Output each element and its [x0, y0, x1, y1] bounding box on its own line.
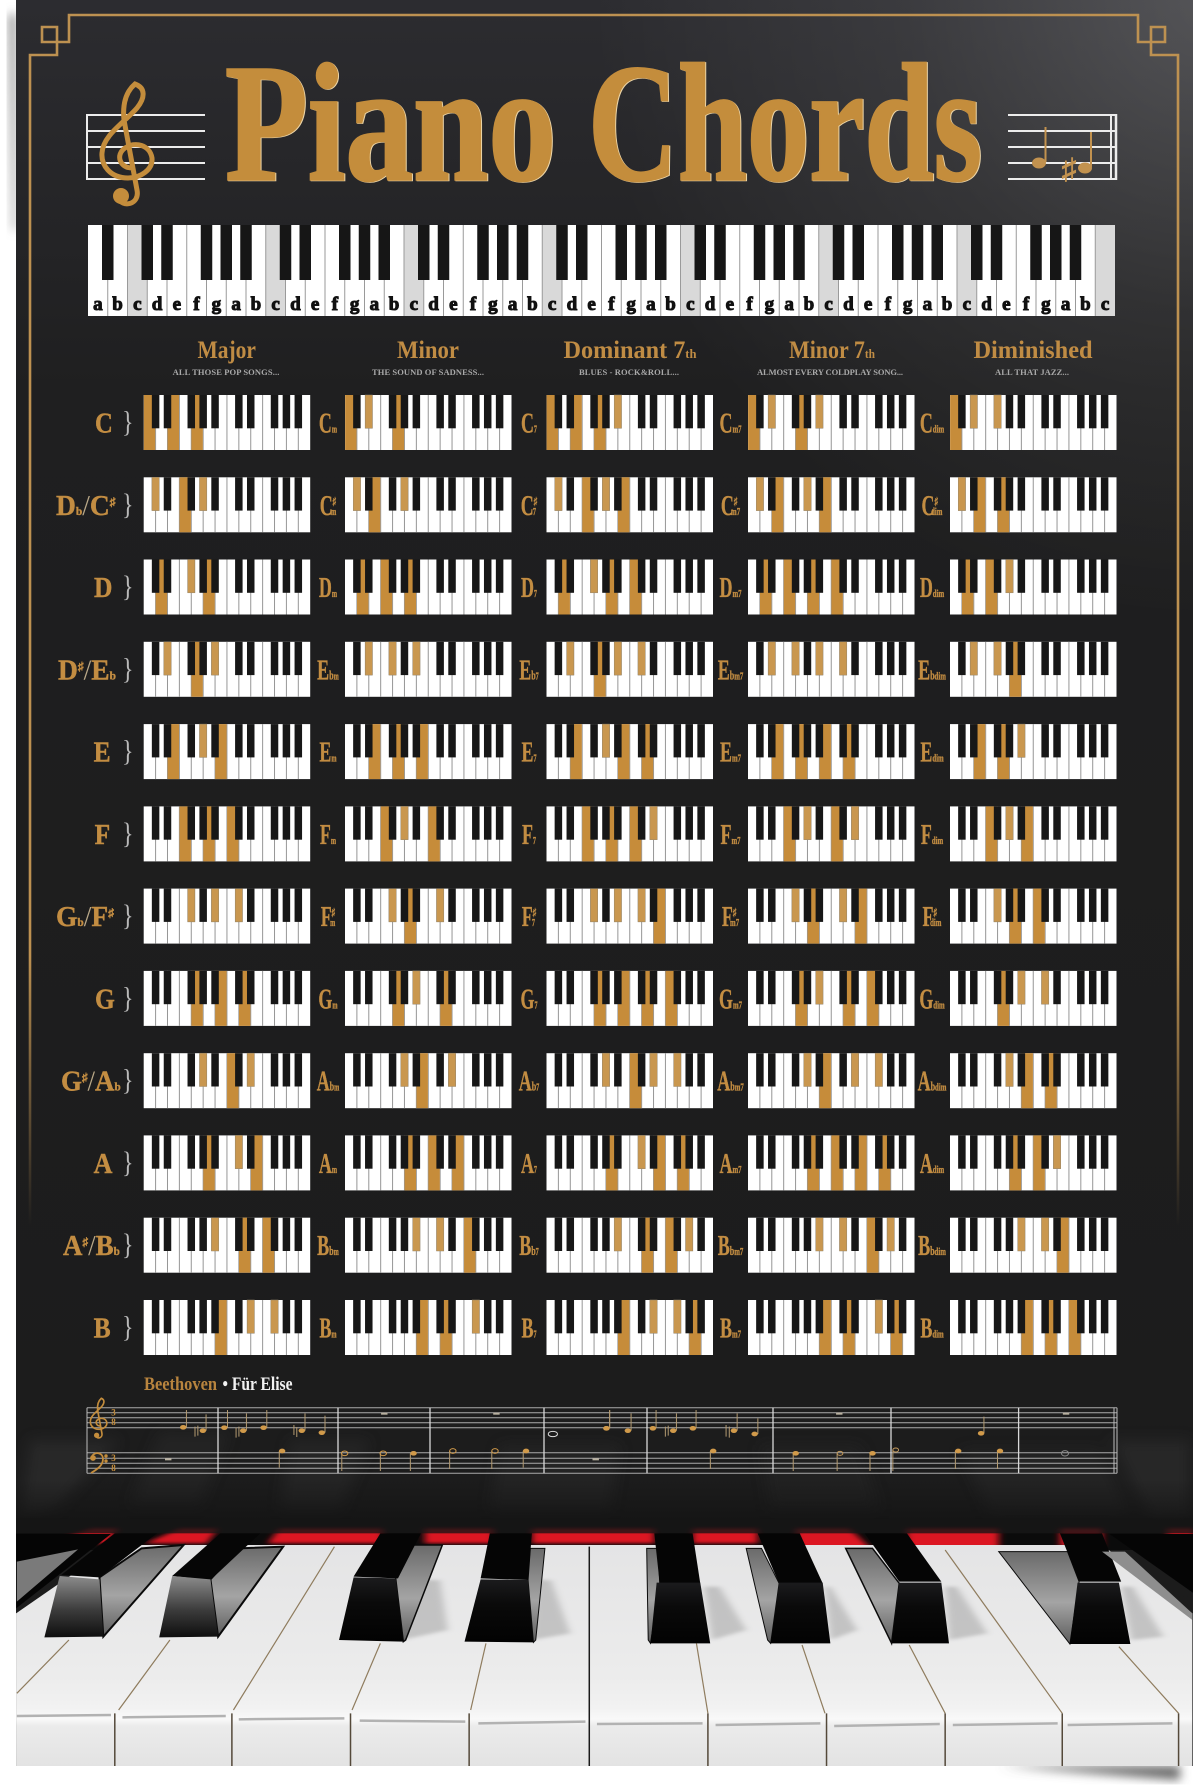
label: Bm7: Bm7 — [720, 1313, 741, 1345]
label: F#7: F — [522, 902, 533, 933]
row label: G#/Ab: } — [122, 1063, 134, 1096]
time signatures: 8 — [111, 1417, 116, 1427]
chord: G minor — [345, 971, 512, 1026]
chord: Fdim — [950, 806, 1116, 861]
row label: G#/Ab: Ab — [95, 1066, 121, 1098]
chord: Gdim — [950, 971, 1116, 1026]
time signatures: 3 — [111, 1408, 116, 1418]
label: Bdim: Bdim — [920, 1313, 944, 1345]
chord: B minor — [345, 1300, 512, 1355]
label: F#m7: F — [722, 902, 733, 933]
label: Edim: Edim — [920, 738, 944, 769]
title: Chords — [588, 30, 982, 216]
chord: Eb7 — [546, 642, 713, 697]
full 88-key keyboard with note letters — [88, 225, 1115, 316]
column heading: Major: Major — [197, 337, 256, 364]
row label: D: } — [122, 569, 134, 603]
label: C#m: m — [331, 506, 336, 517]
black key: far right corner — [1102, 1534, 1194, 1620]
chord diagrams row Eb — [144, 642, 1116, 697]
label: Abdim: Abdim — [918, 1067, 947, 1098]
title: Piano — [226, 31, 557, 217]
chord: Ab major — [144, 1053, 310, 1108]
label: F#m: F — [321, 902, 332, 933]
row label: Db/C# — [56, 487, 134, 522]
label: C#m7: ♯ — [734, 495, 738, 507]
row label: Db/C#: Db/C — [56, 490, 110, 522]
label: Dm7: Dm7 — [719, 573, 742, 604]
chord: A major — [144, 1135, 310, 1190]
label: Bb7: Bb7 — [519, 1231, 539, 1262]
chord diagrams row E — [144, 724, 1116, 779]
chord: F#7 — [546, 889, 713, 944]
row label: D#/Eb: / — [84, 655, 91, 686]
label: F#7: ♯ — [533, 906, 537, 919]
row label: B — [94, 1310, 134, 1344]
row label: G — [95, 981, 134, 1015]
row label: D#/Eb: D — [58, 655, 78, 686]
label: Bbdim: Bbdim — [918, 1231, 946, 1262]
label: F7: F7 — [522, 820, 536, 851]
label: Abm7: Abm7 — [717, 1067, 744, 1098]
label: F#dim: ♯ — [934, 906, 937, 919]
chord diagrams row C — [144, 395, 1116, 450]
dark fade above keyboard photo — [16, 1480, 1193, 1534]
row label: A#/Bb: / — [88, 1230, 96, 1262]
label: Fm7: Fm7 — [720, 820, 741, 851]
row label: G: G — [95, 983, 115, 1015]
label: A7: A7 — [521, 1149, 537, 1180]
label: Gm: Gm — [318, 984, 338, 1016]
chord: G7 — [546, 971, 713, 1026]
black key 1 — [44, 1533, 184, 1637]
black key: far left corner — [16, 1534, 111, 1608]
chord: Gm7 — [748, 971, 914, 1026]
column heading: Major: ALL THOSE POP SONGS... — [173, 367, 279, 377]
white keys — [16, 1545, 1192, 1766]
chord: Ab minor — [345, 1053, 512, 1108]
label: F#7: 7 — [532, 918, 535, 929]
chord: E major — [144, 724, 310, 779]
chord: C#dim — [950, 477, 1116, 532]
label: Eb7: Eb7 — [519, 655, 539, 687]
row label: D#/Eb: } — [122, 652, 134, 685]
label: Am: Am — [319, 1149, 337, 1180]
row label: A#/Bb: A — [63, 1230, 82, 1262]
chord: G major — [144, 971, 310, 1026]
chord: Em7 — [748, 724, 914, 779]
key shadows — [402, 1580, 1163, 1640]
label: F#dim: F — [923, 902, 934, 933]
row label: A: } — [122, 1145, 134, 1179]
row label: E — [94, 734, 134, 768]
black key 2 — [159, 1533, 283, 1637]
label: D7: D7 — [521, 573, 537, 604]
sheet music heading: • Für Elise — [222, 1374, 292, 1395]
column heading: Dominant 7th: BLUES - ROCK&ROLL... — [579, 367, 679, 377]
column heading: Minor — [372, 337, 484, 377]
row label: Gb/F#: ♯ — [108, 907, 114, 920]
row label: Gb/F#: } — [122, 899, 134, 932]
row label: G#/Ab: ♯ — [82, 1071, 88, 1085]
row label: E: } — [122, 734, 134, 767]
label: C#m7: m7 — [731, 505, 740, 517]
label: F#m7: ♯ — [733, 906, 737, 919]
label: Ebm: Ebm — [317, 655, 339, 687]
label: Am7: Am7 — [719, 1149, 742, 1180]
chord: Bbm7 — [748, 1218, 914, 1273]
chord: Cdim — [950, 395, 1116, 450]
row label: B: B — [94, 1312, 111, 1344]
chord: B major — [144, 1300, 310, 1355]
label: C#7: 7 — [533, 506, 536, 517]
decorative gold frame — [30, 15, 1178, 1225]
row label: A — [94, 1145, 134, 1179]
row label: A#/Bb: ♯ — [82, 1236, 88, 1249]
photo: grand piano keyboard — [16, 1518, 1195, 1766]
column heading: Major — [173, 337, 279, 377]
chord: C minor — [345, 395, 512, 450]
sheet music heading — [144, 1374, 292, 1395]
label: Cm: Cm — [319, 408, 337, 440]
row label: Db/C#: } — [122, 487, 134, 520]
row label: G#/Ab: G — [61, 1066, 82, 1098]
icon: right staff with notes: ♯ — [1062, 153, 1076, 186]
chord: F7 — [546, 806, 713, 861]
chord: A7 — [546, 1135, 713, 1190]
chord: A minor — [345, 1135, 512, 1190]
full 88-key keyboard with note letters: abcdefgabcdefgabcdefgabcdefgabcdefgabcdefgabcdefgabc — [93, 294, 1109, 315]
chord diagrams row Db — [144, 477, 1116, 532]
chord: Bb minor — [345, 1218, 512, 1273]
chord: B7 — [546, 1300, 713, 1355]
chord: F#m7 — [748, 889, 914, 944]
title: Piano — [225, 30, 556, 216]
row label: A#/Bb — [63, 1228, 134, 1262]
label: Abm: Abm — [317, 1067, 339, 1098]
chord: Ebm7 — [748, 642, 914, 697]
label: Fm: Fm — [320, 820, 336, 851]
black key 7 — [846, 1533, 949, 1643]
label: C#m: ♯ — [333, 495, 336, 507]
chord: Ab7 — [546, 1053, 713, 1108]
chord: E7 — [546, 724, 713, 779]
column heading: Minor 7th — [757, 337, 903, 377]
row label: Gb/F# — [56, 899, 134, 933]
label: B7: B7 — [521, 1313, 537, 1345]
chord: F major — [144, 806, 310, 861]
row label: Gb/F#: Gb/F — [56, 901, 108, 933]
time signatures: 8 — [111, 1463, 116, 1473]
icon: bass clef — [91, 1453, 107, 1473]
label: C#7: ♯ — [534, 495, 538, 507]
black key 5 — [647, 1533, 710, 1643]
row label: A#/Bb: Bb — [96, 1230, 120, 1262]
label: Ddim: Ddim — [920, 573, 944, 604]
column heading: Minor: Minor — [397, 337, 459, 364]
black key 6 — [746, 1533, 830, 1643]
chord: D minor — [345, 560, 512, 614]
row label: C: } — [122, 405, 134, 438]
label: Ebm7: Ebm7 — [718, 655, 744, 687]
chord diagrams row A — [144, 1135, 1116, 1190]
chord: C#7 — [546, 477, 713, 532]
column heading: Minor 7th: ALMOST EVERY COLDPLAY SONG... — [757, 367, 903, 377]
notes, left half — [165, 1410, 610, 1471]
time signatures — [111, 1408, 116, 1473]
label: C#m: C — [320, 491, 333, 522]
chord: Eb minor — [345, 642, 512, 697]
row label: F — [95, 816, 134, 850]
chord diagrams row D — [144, 560, 1116, 614]
label: Bbm: Bbm — [317, 1231, 339, 1262]
chord: Am7 — [748, 1135, 914, 1190]
chord: Abm7 — [748, 1053, 914, 1108]
row label: G#/Ab: / — [88, 1066, 95, 1098]
row label: C — [95, 405, 134, 439]
sheet music staff: Für Elise — [87, 1398, 1117, 1473]
label: C#m7: C — [721, 491, 734, 522]
chord: Bdim — [950, 1300, 1116, 1355]
label: Adim: Adim — [920, 1149, 944, 1180]
label: Ebdim: Ebdim — [918, 655, 946, 687]
notes, right half — [603, 1410, 1069, 1471]
row label: D#/Eb — [58, 652, 134, 686]
row label: A: A — [94, 1147, 113, 1179]
label: F#m7: m7 — [730, 916, 739, 929]
chord: D major — [144, 560, 310, 614]
label: G7: G7 — [520, 984, 538, 1016]
black key 4 — [465, 1533, 545, 1642]
row label: B: } — [122, 1310, 134, 1343]
column heading: Minor 7th: Minor 7th — [789, 337, 875, 364]
chord: Cm7 — [748, 395, 914, 450]
label: C#dim: C — [922, 491, 935, 522]
label: Cm7: Cm7 — [719, 408, 742, 440]
title — [225, 30, 983, 217]
label: Em7: Em7 — [720, 738, 741, 769]
chord: Abdim — [950, 1053, 1116, 1108]
chord diagrams row Ab — [144, 1053, 1116, 1108]
chord: F minor — [345, 806, 512, 861]
chord diagrams row G — [144, 971, 1116, 1026]
chord: F#dim — [950, 889, 1116, 944]
label: Dm: Dm — [319, 573, 337, 604]
label: E7: E7 — [521, 738, 537, 769]
chord: Eb major — [144, 642, 310, 697]
chord: F# minor — [345, 889, 512, 944]
label: F#dim: dim — [930, 916, 942, 929]
sheet music heading: Beethoven — [144, 1374, 217, 1395]
column heading: Diminished: Diminished — [973, 337, 1093, 364]
column heading: Minor: THE SOUND OF SADNESS... — [372, 367, 484, 377]
row label: Db/C#: ♯ — [110, 496, 116, 509]
row label: D#/Eb: ♯ — [78, 660, 84, 673]
label: C#dim: dim — [931, 505, 943, 517]
label: C#7: C — [521, 491, 534, 522]
chord: Bbdim — [950, 1218, 1116, 1273]
chord: Dm7 — [748, 560, 914, 614]
row label: D — [94, 569, 134, 603]
chord: Adim — [950, 1135, 1116, 1190]
chord: C#m7 — [748, 477, 914, 532]
chord: C# minor — [345, 477, 512, 532]
chord: Db major — [144, 477, 310, 532]
chord: Ebdim — [950, 642, 1116, 697]
chord: Bb7 — [546, 1218, 713, 1273]
chord diagrams row B — [144, 1300, 1116, 1355]
label: Cdim: Cdim — [920, 408, 944, 440]
label: C7: C7 — [521, 408, 537, 440]
chord: E minor — [345, 724, 512, 779]
row label: F: } — [122, 816, 134, 850]
chord: Bb major — [144, 1218, 310, 1273]
column heading: Dominant 7th: Dominant 7th — [563, 337, 697, 364]
row label: F: F — [95, 818, 110, 850]
label: F#m: ♯ — [332, 906, 335, 919]
icon: left staff with treble clef — [87, 84, 205, 204]
label: C#dim: ♯ — [935, 495, 938, 507]
column heading: Diminished: ALL THAT JAZZ... — [995, 367, 1069, 377]
label: Gm7: Gm7 — [719, 984, 742, 1016]
column heading: Diminished — [973, 337, 1093, 377]
chord diagrams row Gb — [144, 889, 1116, 944]
chord: C7 — [546, 395, 713, 450]
felt and key bed — [66, 1526, 1193, 1550]
chord: Gb major — [144, 889, 310, 944]
time signatures: 3 — [111, 1453, 116, 1463]
row label: D: D — [94, 572, 112, 603]
label: Ab7: Ab7 — [519, 1067, 539, 1098]
label: Fdim: Fdim — [921, 820, 943, 851]
faint keyboard reflection — [28, 1444, 1186, 1498]
label: F#m: m — [330, 918, 335, 929]
label: Em: Em — [319, 738, 337, 769]
column heading: Dominant 7th — [563, 337, 697, 377]
label: Bm: Bm — [319, 1313, 337, 1345]
row label: G: } — [122, 981, 134, 1014]
icon: small treble clef — [90, 1398, 107, 1438]
chord: Bm7 — [748, 1300, 914, 1355]
title: Chords — [589, 31, 983, 217]
row label: A#/Bb: } — [122, 1228, 134, 1261]
chord diagrams row F — [144, 806, 1116, 861]
row label: G#/Ab — [61, 1063, 134, 1098]
row label: C: C — [95, 407, 113, 439]
label: Bbm7: Bbm7 — [718, 1231, 744, 1262]
label: Gdim: Gdim — [919, 984, 945, 1016]
chord: Ddim — [950, 560, 1116, 614]
row label: E: E — [94, 736, 111, 768]
black key 3 — [339, 1533, 442, 1642]
icon: right staff with notes — [1008, 114, 1116, 186]
black key 8 — [999, 1533, 1130, 1644]
chord diagrams row Bb — [144, 1218, 1116, 1273]
chord: D7 — [546, 560, 713, 614]
chord: C major — [144, 395, 310, 450]
chord: Edim — [950, 724, 1116, 779]
row label: D#/Eb: Eb — [91, 655, 116, 686]
chord: Fm7 — [748, 806, 914, 861]
